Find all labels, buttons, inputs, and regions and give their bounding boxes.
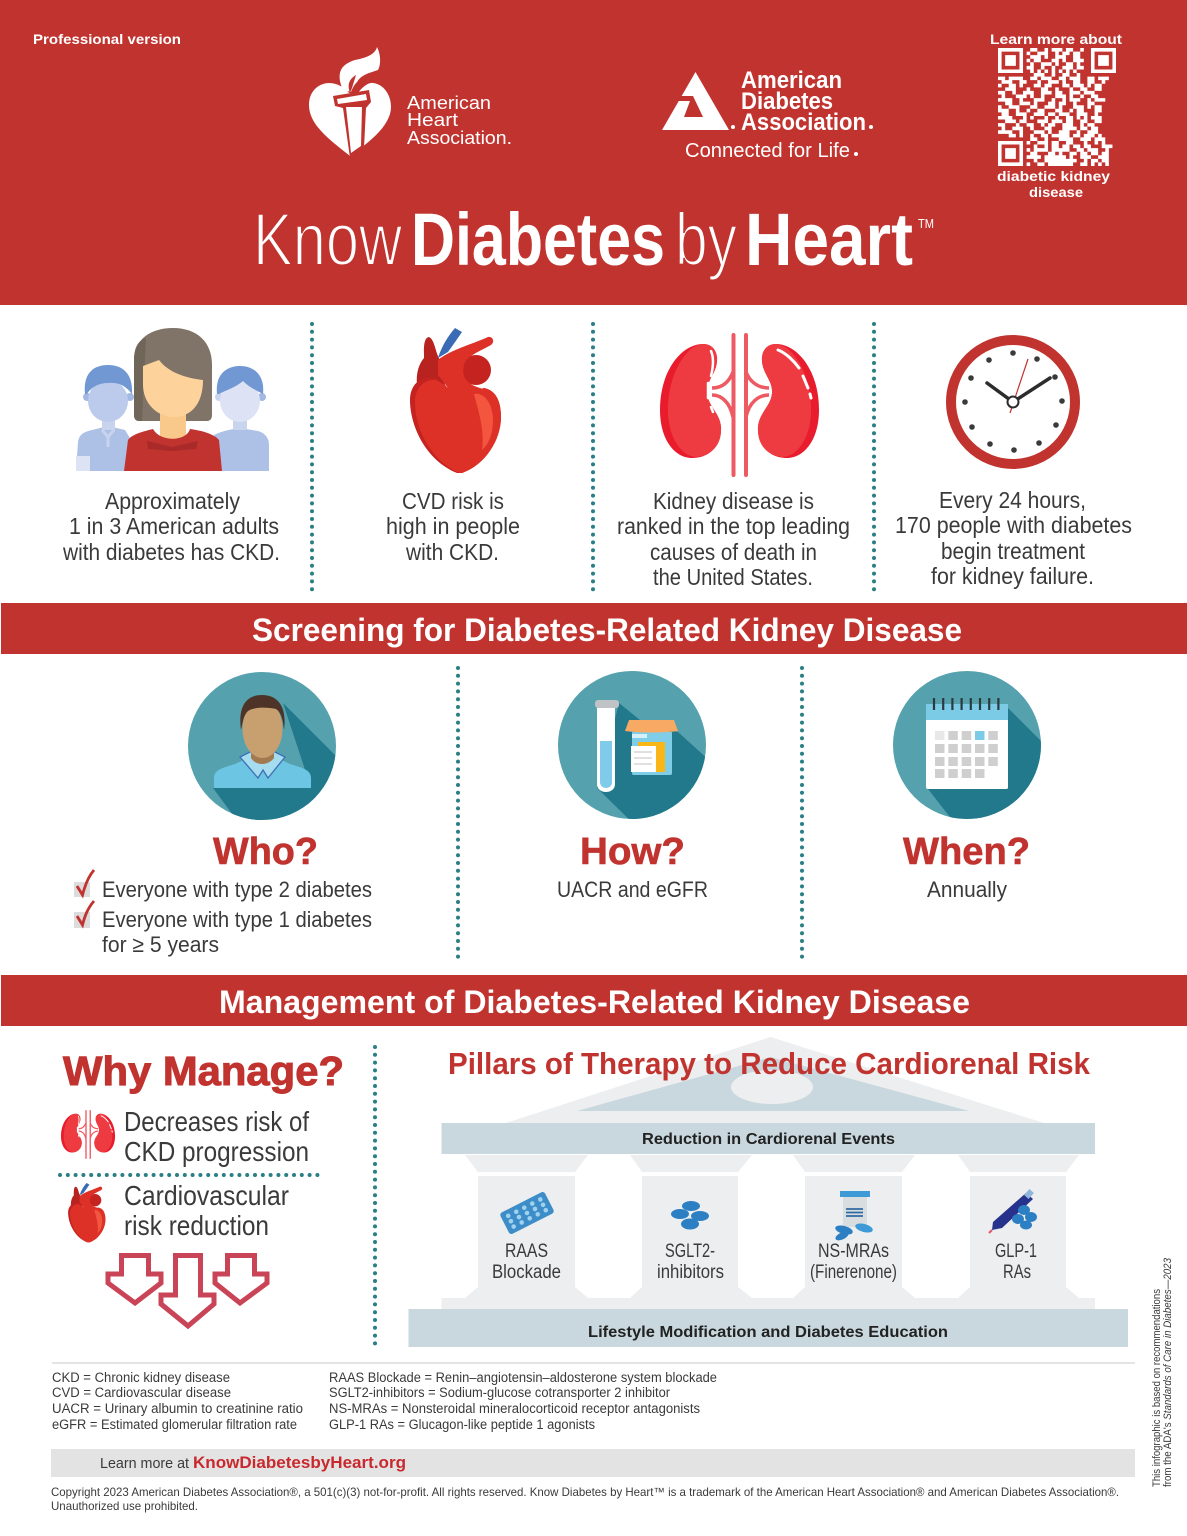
- pillar: SGLT2 inhibitors: inhibitors: [657, 1262, 724, 1283]
- icon: three down arrows: [108, 1256, 267, 1326]
- panel: who: [74, 672, 372, 957]
- when text: Annually: [927, 877, 1008, 902]
- copyright: Unauthorized use prohibited.: [51, 1499, 198, 1513]
- benefit: CKD progression: CKD progression: [124, 1136, 309, 1167]
- abbreviations: left column: CKD = Chronic kidney disease: [52, 1370, 230, 1385]
- stat text: [386, 488, 520, 565]
- pillar: RAAS blockade: Blockade: [492, 1262, 561, 1283]
- abbreviations: left column: [52, 1370, 303, 1432]
- icon: small kidneys: [61, 1110, 115, 1159]
- icon: heart: [410, 328, 501, 473]
- section heading: management: [1, 975, 1187, 1026]
- title: Know Diabetes by Heart: by: [675, 198, 737, 281]
- learn more bar: [51, 1449, 1135, 1477]
- stat text: [895, 487, 1132, 589]
- stat text: Approximately: [105, 488, 240, 514]
- abbreviations: left column: eGFR = Estimated glomerular filtration rate: [52, 1417, 297, 1432]
- checklist: [74, 870, 372, 957]
- American Heart Association logo: [309, 47, 512, 158]
- stat text: for kidney failure.: [931, 563, 1094, 589]
- icon: pill bottle and capsules: [834, 1191, 874, 1242]
- American Diabetes Association logo: [662, 67, 873, 162]
- copyright: Copyright 2023 American Diabetes Association®, a 501(c)(3) not-for-profit. All rights reserved. Know Diabetes by Heart™ is a trademark of the American Heart Association® and American Diabetes Association®.: [51, 1485, 1119, 1499]
- stat text: 1 in 3 American adults: [69, 513, 279, 539]
- pillar: SGLT2 inhibitors: SGLT2-: [665, 1241, 715, 1262]
- copyright: [51, 1485, 1119, 1513]
- benefit: cardiovascular risk: risk reduction: [124, 1210, 269, 1241]
- vertical source note: This infographic is based on recommendations: [1151, 1289, 1163, 1487]
- panel: pillars of therapy: [408, 1037, 1128, 1347]
- American Heart Association logo: American: [407, 93, 491, 113]
- header band: [0, 0, 1187, 305]
- icon: injector pen and tablets: [989, 1189, 1037, 1233]
- beam: reduction in cardiorenal events: [442, 1123, 1095, 1154]
- QR code block: [990, 31, 1122, 200]
- base: lifestyle modification: [408, 1309, 1128, 1347]
- icon: small heart: [68, 1183, 105, 1242]
- icon: blister pack: [499, 1191, 555, 1235]
- stat text: ranked in the top leading: [617, 513, 850, 539]
- pillar: SGLT2 inhibitors: [657, 1201, 724, 1283]
- panel: when: [893, 671, 1050, 902]
- temple columns: [442, 1155, 1095, 1309]
- American Diabetes Association logo: Association: [741, 109, 866, 136]
- icon: kidneys: [660, 333, 819, 477]
- stat text: with diabetes has CKD.: [62, 539, 280, 565]
- section heading: management: Management of Diabetes-Related Kidney Disease: [219, 984, 970, 1020]
- learn more bar: KnowDiabetesbyHeart.org: [193, 1453, 406, 1472]
- heading: how: How?: [580, 831, 685, 873]
- icon: person in circle: [188, 672, 336, 820]
- pillar: NS-MRAs: [810, 1191, 897, 1283]
- pillar: GLP-1 RAs: GLP-1: [995, 1241, 1037, 1262]
- title: Know Diabetes by Heart: Know: [253, 198, 402, 281]
- benefit: cardiovascular risk: Cardiovascular: [124, 1180, 289, 1211]
- benefit: CKD progression: Decreases risk of: [124, 1106, 309, 1137]
- icon: test tube and urine cup in circle: [558, 671, 706, 819]
- stat text: the United States.: [653, 564, 813, 590]
- checklist: Everyone with type 1 diabetes: [102, 907, 372, 932]
- stat text: 170 people with diabetes: [895, 512, 1132, 538]
- stat text: high in people: [386, 513, 520, 539]
- stat text: with CKD.: [405, 539, 499, 565]
- how text: UACR and eGFR: [557, 877, 708, 902]
- learn more bar: Learn more at: [100, 1455, 190, 1472]
- abbreviations: right column: GLP-1 RAs = Glucagon-like peptide 1 agonists: [329, 1417, 595, 1432]
- stat: kidney disease ranking: [617, 333, 850, 590]
- title: Know Diabetes by Heart: Diabetes: [411, 198, 665, 281]
- American Diabetes Association logo: Diabetes: [741, 88, 833, 115]
- stat text: [617, 488, 850, 590]
- icon: calendar in circle: [893, 671, 1041, 819]
- abbreviations: left column: UACR = Urinary albumin to creatinine ratio: [52, 1401, 303, 1416]
- benefit: CKD progression: [124, 1106, 309, 1167]
- American Diabetes Association logo: Connected for Life: [685, 140, 850, 162]
- pillar: RAAS blockade: RAAS: [505, 1241, 548, 1262]
- abbreviations: right column: SGLT2-inhibitors = Sodium-glucose cotransporter 2 inhibitor: [329, 1385, 670, 1400]
- stat text: Kidney disease is: [653, 488, 814, 514]
- checklist: for ≥ 5 years: [102, 932, 219, 957]
- pillar: RAAS blockade: [492, 1191, 561, 1283]
- section heading: screening: [1, 603, 1187, 654]
- icon: family group: [76, 328, 269, 471]
- QR code block: diabetic kidney: [997, 168, 1110, 184]
- checklist: Everyone with type 2 diabetes: [102, 877, 372, 902]
- heading: who: Who?: [213, 831, 318, 873]
- temple roof: [506, 1037, 1044, 1123]
- vertical source note: from the ADA's Standards of Care in Diabetes—2023: [1162, 1257, 1174, 1487]
- heading: pillars of therapy: Pillars of Therapy to Reduce Cardiorenal Risk: [448, 1046, 1091, 1081]
- American Heart Association logo: Heart: [407, 110, 458, 130]
- pillar: GLP-1 RAs: [989, 1189, 1037, 1283]
- professional version label: Professional version: [33, 31, 181, 47]
- stat: 1 in 3 adults has CKD: [62, 328, 280, 565]
- section heading: screening: Screening for Diabetes-Related Kidney Disease: [252, 612, 962, 648]
- title: Know Diabetes by Heart: TM: [918, 216, 934, 231]
- abbreviations: left column: CVD = Cardiovascular disease: [52, 1385, 231, 1400]
- beam: reduction in cardiorenal events: Reduction in Cardiorenal Events: [642, 1131, 895, 1148]
- pillar: GLP-1 RAs: RAs: [1003, 1262, 1031, 1283]
- panel: how: [558, 671, 707, 897]
- stat: CVD risk: [386, 328, 520, 565]
- base: lifestyle modification: Lifestyle Modification and Diabetes Education: [588, 1324, 948, 1341]
- title: Know Diabetes by Heart: [253, 198, 934, 281]
- panel: why manage: [60, 1048, 344, 1326]
- abbreviations: right column: RAAS Blockade = Renin–angiotensin–aldosterone system blockade: [329, 1370, 717, 1385]
- vertical source note: [1151, 1257, 1174, 1487]
- pillar: NS-MRAs: (Finerenone): [810, 1262, 897, 1283]
- American Diabetes Association logo: American: [741, 67, 842, 94]
- abbreviations: right column: NS-MRAs = Nonsteroidal mineralocorticoid receptor antagonists: [329, 1401, 700, 1416]
- heading: why manage: Why Manage?: [63, 1048, 344, 1094]
- stat text: CVD risk is: [402, 488, 504, 514]
- stat: 170 people per 24 hours: [895, 340, 1132, 589]
- stat text: causes of death in: [650, 539, 817, 565]
- QR code block: Learn more about: [990, 31, 1122, 47]
- QR code block: disease: [1029, 184, 1083, 200]
- title: Know Diabetes by Heart: Heart: [745, 198, 913, 281]
- abbreviations: right column: [329, 1370, 717, 1432]
- icon: clock: [951, 340, 1075, 464]
- icon: tablets: [671, 1201, 709, 1230]
- stat text: Every 24 hours,: [939, 487, 1086, 513]
- benefit: cardiovascular risk: [124, 1180, 289, 1241]
- pillar: NS-MRAs: NS-MRAs: [818, 1241, 889, 1262]
- American Heart Association logo: Association.: [407, 128, 512, 148]
- stat text: begin treatment: [941, 538, 1086, 564]
- stat text: [62, 488, 280, 565]
- heading: when: When?: [903, 831, 1030, 873]
